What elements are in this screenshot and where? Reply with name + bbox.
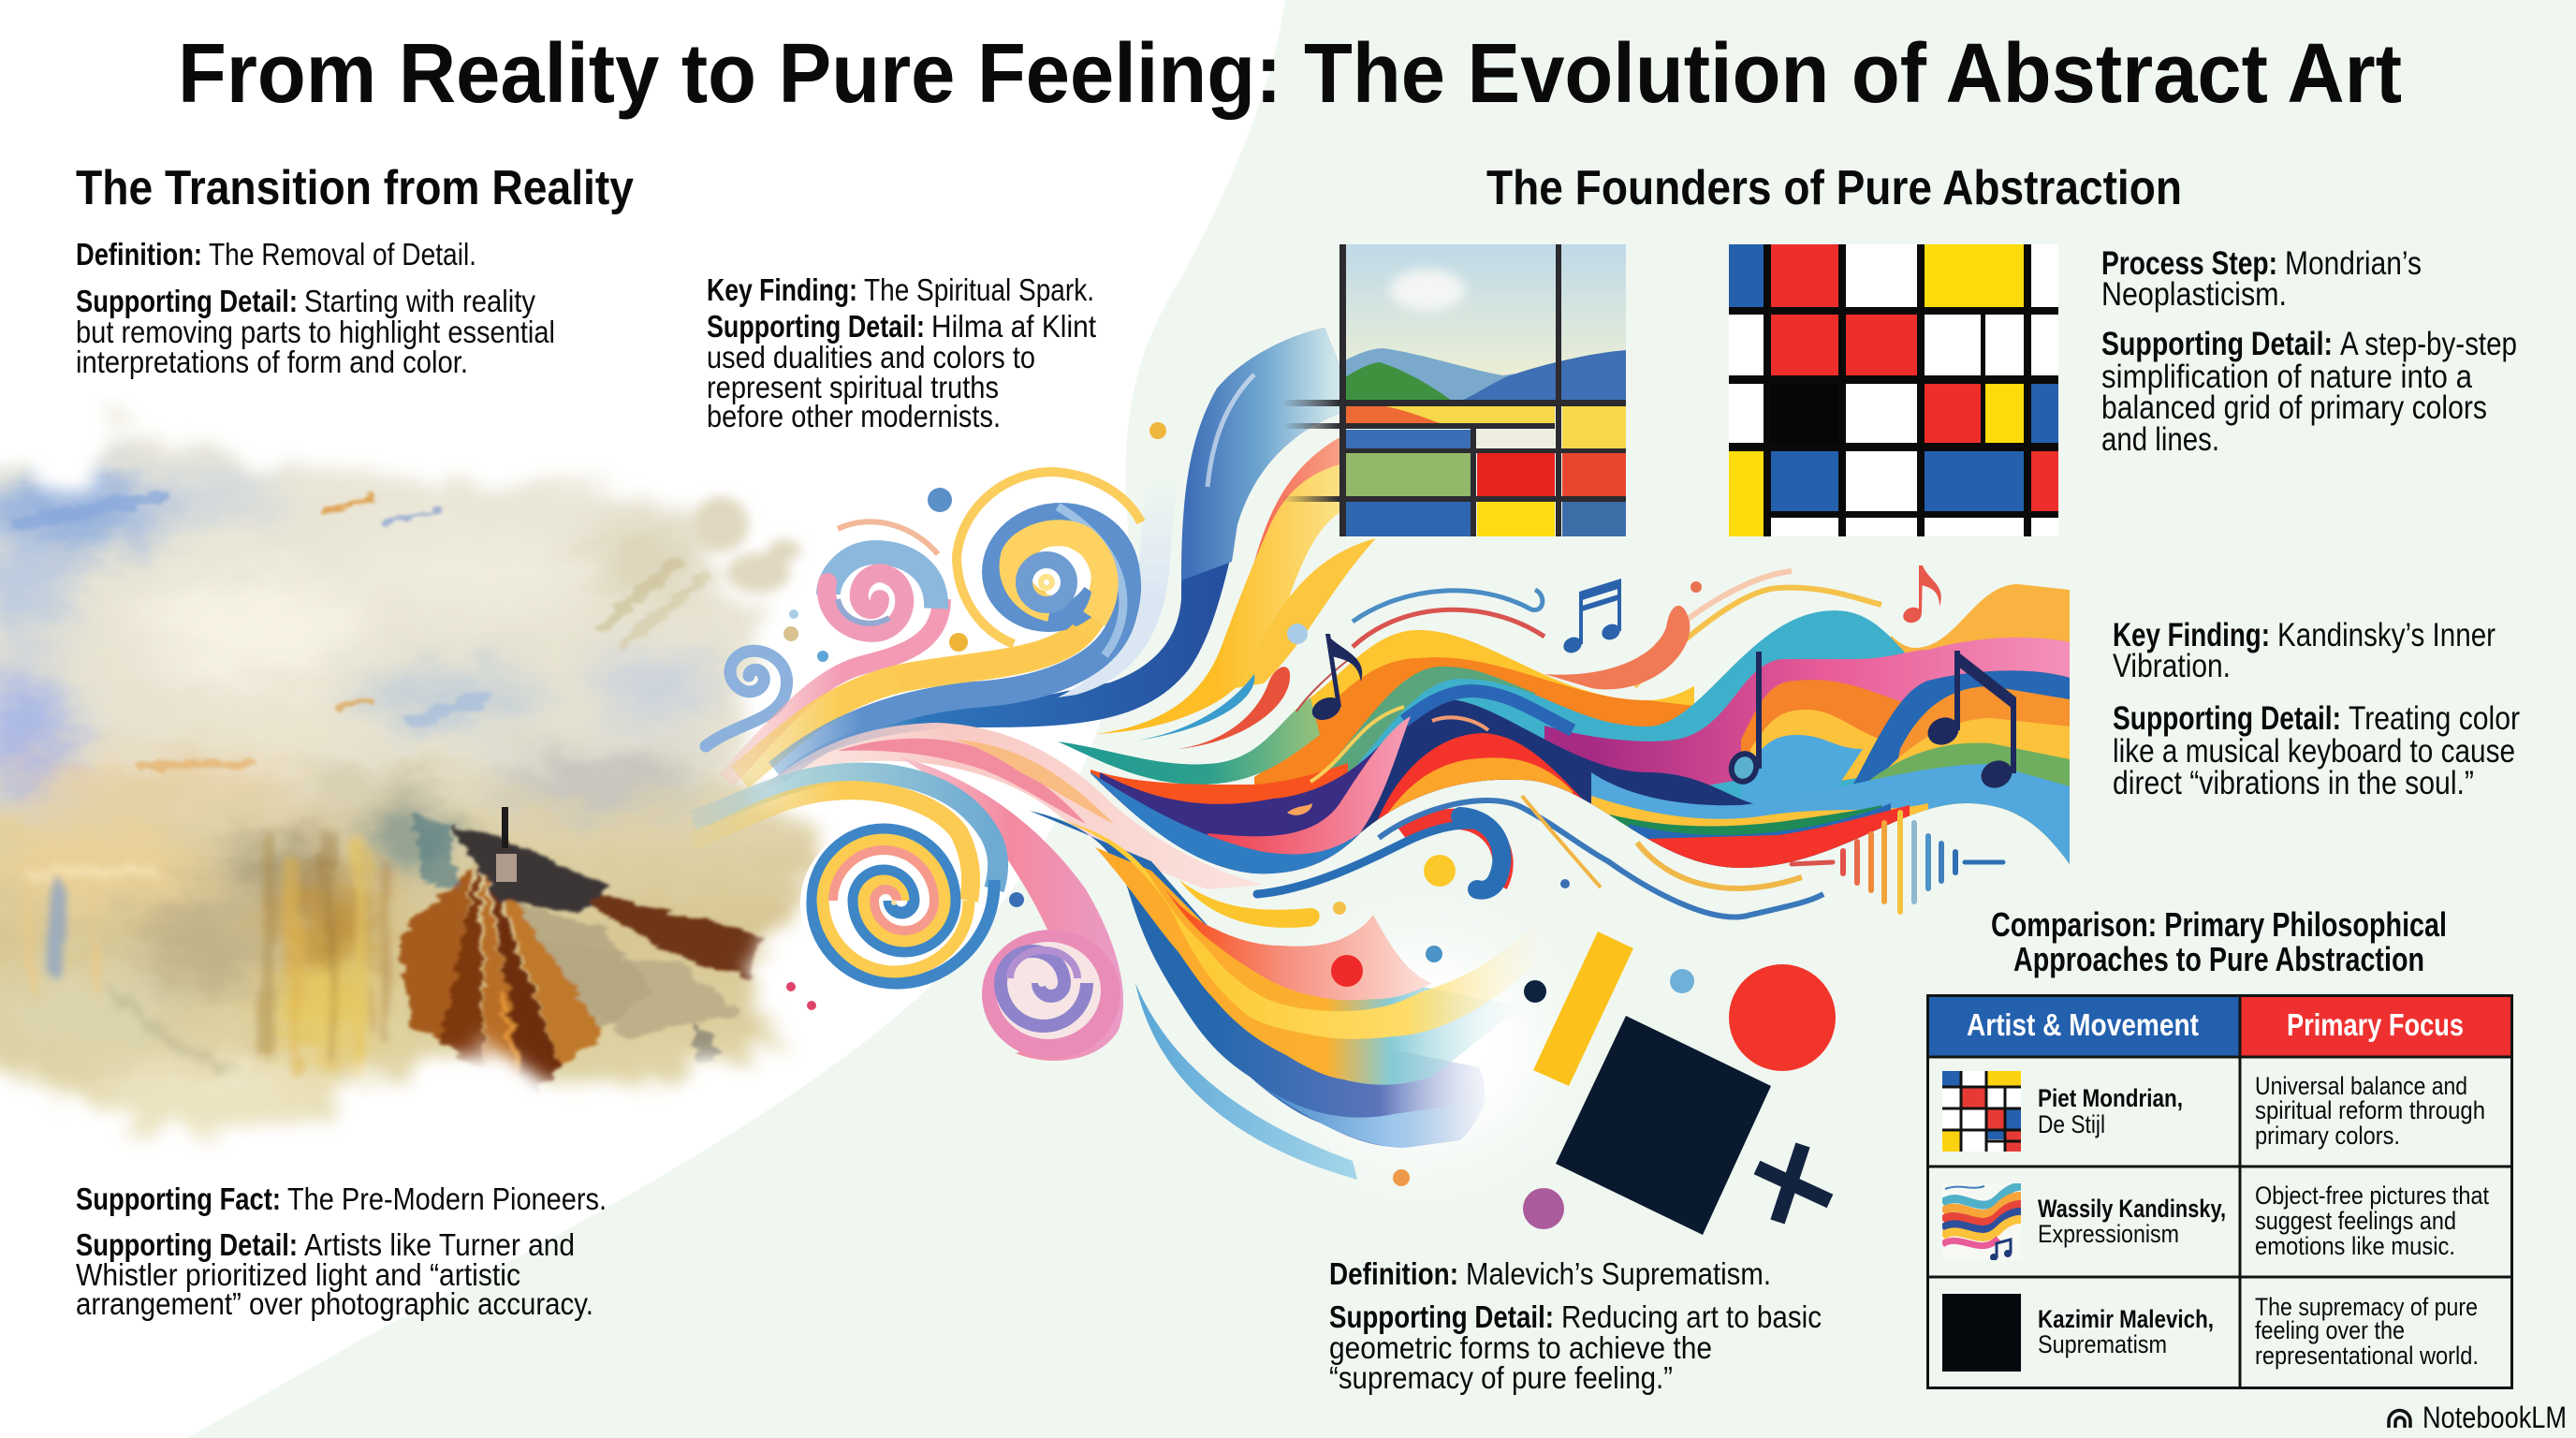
- text block: inner vibration: Kandinsky’s Inner: [2277, 617, 2496, 653]
- painting detail: tracks and smoke: [396, 811, 766, 1092]
- table row: Mondrian: primary colors.: [2255, 1122, 2400, 1150]
- text block: spiritual spark: The Spiritual Spark.: [864, 272, 1094, 307]
- text block: removal of detail: Supporting Detail:: [76, 284, 298, 318]
- accents: scattered dots: [783, 422, 1702, 1010]
- table row: Malevich: Suprematism: [2038, 1330, 2167, 1358]
- text block: removal of detail: Definition:: [76, 237, 202, 271]
- text block: pre-modern pioneers: The Pre-Modern Pioneers.: [287, 1181, 607, 1216]
- icon: blue beamed notes: [1561, 579, 1622, 655]
- text block: pre-modern pioneers: Artists like Turner and: [304, 1227, 575, 1262]
- icon: navy eighth note: [1309, 634, 1362, 725]
- text block: inner vibration: [2113, 617, 2520, 801]
- spiral: pink and blue: [827, 521, 938, 633]
- text block: pre-modern pioneers: Supporting Detail:: [76, 1227, 298, 1262]
- flow: separate light-blue ribbon: [1135, 983, 1357, 1180]
- main heading: From Reality to Pure Feeling: The Evolution of Abstract Art: [178, 27, 2402, 121]
- comparison table: [1926, 994, 2512, 1387]
- flow: pink ribbon into spiral: [726, 599, 942, 780]
- table row: Kandinsky: suggest feelings and: [2255, 1207, 2456, 1235]
- text block: suprematism: geometric forms to achieve the: [1329, 1330, 1712, 1365]
- comparison heading: Approaches to Pure Abstraction: [2013, 940, 2424, 978]
- painting detail: sky brushstrokes: [19, 496, 707, 768]
- icon: train chimney: [502, 807, 508, 848]
- text block: neoplasticism: simplification of nature into a: [2101, 359, 2472, 395]
- text block: neoplasticism: Process Step:: [2101, 245, 2277, 282]
- icon: navy quarter note: [1728, 652, 1762, 785]
- icon: navy beamed notes: [1924, 651, 2016, 793]
- table row: Malevich: feeling over the: [2255, 1316, 2405, 1344]
- table header: artist and movement: Artist & Movement: [1967, 1007, 2199, 1042]
- text block: suprematism: Supporting Detail:: [1329, 1299, 1554, 1334]
- text block: spiritual spark: Key Finding:: [707, 272, 857, 307]
- table header: primary focus: Primary Focus: [2287, 1007, 2464, 1042]
- text block: inner vibration: Vibration.: [2113, 648, 2231, 684]
- table row: Malevich: [1942, 1293, 2479, 1372]
- table row: Mondrian: De Stijl: [2038, 1110, 2105, 1138]
- text block: removal of detail: but removing parts to highlight essential: [76, 315, 555, 349]
- background: white left region: [0, 0, 1285, 1438]
- flow: yellow tail: [1179, 880, 1320, 928]
- table header: artist and movement: [1926, 994, 2240, 1057]
- text block: suprematism: Definition:: [1329, 1256, 1458, 1291]
- table row: Malevich: Kazimir Malevich,: [2038, 1305, 2214, 1333]
- spiral: lower pink and purple: [982, 930, 1120, 1059]
- painting: landscape dissolving into grid: [1282, 244, 1626, 536]
- background: soft white glow behind lower flows: [1301, 946, 1544, 1152]
- spiral: large blue and yellow: [777, 472, 1141, 772]
- table row: Mondrian: Universal balance and: [2255, 1072, 2467, 1100]
- text block: removal of detail: The Removal of Detail.: [209, 237, 476, 271]
- painting: Mondrian grid: [1729, 244, 2058, 536]
- table row: Kandinsky: Object-free pictures that: [2255, 1181, 2489, 1210]
- text block: pre-modern pioneers: [76, 1181, 607, 1321]
- text block: removal of detail: Starting with reality: [304, 284, 535, 318]
- flow: ribbons rising into the grid painting: [769, 328, 1376, 783]
- text block: inner vibration: Key Finding:: [2113, 617, 2270, 653]
- text block: suprematism: Malevich’s Suprematism.: [1466, 1256, 1771, 1291]
- Suprematist composition: [1393, 932, 1836, 1235]
- wave: main rainbow ribbon: [1058, 584, 2070, 874]
- table row: Kandinsky: emotions like music.: [2255, 1232, 2455, 1260]
- spiral: large lower multicolour: [693, 773, 998, 988]
- table row: Malevich: The supremacy of pure: [2255, 1293, 2478, 1321]
- text block: inner vibration: direct “vibrations in the soul.”: [2113, 765, 2474, 801]
- text block: spiritual spark: [707, 272, 1096, 433]
- text block: neoplasticism: and lines.: [2101, 421, 2219, 458]
- comparison heading: [1991, 905, 2447, 978]
- text block: pre-modern pioneers: arrangement” over photographic accuracy.: [76, 1286, 593, 1321]
- flow: coral band fade: [1164, 887, 1432, 1000]
- flow: yellow ribbon into large spiral: [739, 532, 1105, 777]
- painting detail: vertical gold brushwork: [28, 833, 384, 1067]
- text block: inner vibration: Supporting Detail:: [2113, 700, 2341, 737]
- comparison heading: Comparison: Primary Philosophical: [1991, 905, 2447, 944]
- text block: suprematism: “supremacy of pure feeling.”: [1329, 1360, 1673, 1395]
- accents: streaks above the wave: [1130, 571, 1881, 749]
- text block: pre-modern pioneers: Supporting Fact:: [76, 1181, 281, 1216]
- text block: inner vibration: Treating color: [2349, 700, 2520, 737]
- spiral: small blue: [706, 651, 787, 746]
- section heading: transition: The Transition from Reality: [76, 161, 634, 215]
- text block: neoplasticism: Supporting Detail:: [2101, 326, 2333, 362]
- text block: spiritual spark: represent spiritual truths: [707, 370, 999, 404]
- text block: inner vibration: like a musical keyboard to cause: [2113, 733, 2515, 770]
- text block: removal of detail: interpretations of form and color.: [76, 345, 468, 379]
- text block: neoplasticism: Neoplasticism.: [2101, 276, 2287, 313]
- table row: Kandinsky: Wassily Kandinsky,: [2038, 1195, 2226, 1223]
- flow: lower light-blue fade: [1254, 1081, 1488, 1148]
- icon: mini Mondrian: [1942, 1071, 2021, 1152]
- painting detail: beige wisps: [693, 496, 801, 594]
- table row: Kandinsky: Expressionism: [2038, 1220, 2179, 1248]
- flow: lower blue band: [1030, 811, 1485, 1148]
- painting: dissolving Turner landscape: [0, 393, 880, 1161]
- text block: neoplasticism: balanced grid of primary colors: [2101, 389, 2487, 426]
- table row: Kandinsky: [1942, 1181, 2489, 1261]
- icon: red note: [1901, 565, 1941, 625]
- icon: sound wave: [1792, 813, 2003, 912]
- text block: suprematism: [1329, 1256, 1822, 1395]
- text block: neoplasticism: [2101, 245, 2517, 458]
- text block: spiritual spark: Supporting Detail:: [707, 309, 925, 344]
- table row: Mondrian: spiritual reform through: [2255, 1096, 2485, 1124]
- text block: spiritual spark: before other modernists.: [707, 399, 1001, 433]
- section heading: founders: The Founders of Pure Abstraction: [1486, 161, 2182, 215]
- text block: suprematism: Reducing art to basic: [1561, 1299, 1822, 1334]
- text block: neoplasticism: Mondrian’s: [2285, 245, 2422, 282]
- text block: removal of detail: [76, 237, 555, 379]
- table header: primary focus: [2240, 994, 2512, 1057]
- flow: yellow band fade: [1058, 819, 1535, 1039]
- table row: Mondrian: Piet Mondrian,: [2038, 1084, 2183, 1112]
- table row: Malevich: representational world.: [2255, 1342, 2479, 1370]
- text block: spiritual spark: used dualities and colors to: [707, 340, 1035, 374]
- flow: peach ribbon: [739, 723, 1264, 889]
- table row: Mondrian: [1942, 1071, 2485, 1152]
- icon: black square: [1942, 1294, 2021, 1372]
- text block: neoplasticism: A step-by-step: [2340, 326, 2517, 362]
- flow: gold into teal band: [1095, 847, 1521, 1085]
- flow: pink ribbon down to lower spiral: [899, 756, 1123, 1061]
- text block: spiritual spark: Hilma af Klint: [931, 309, 1096, 344]
- accents: curling strokes below the wave: [1257, 796, 1823, 917]
- text block: pre-modern pioneers: Whistler prioritized light and “artistic: [76, 1257, 520, 1292]
- icon: mini Kandinsky wave: [1942, 1183, 2027, 1261]
